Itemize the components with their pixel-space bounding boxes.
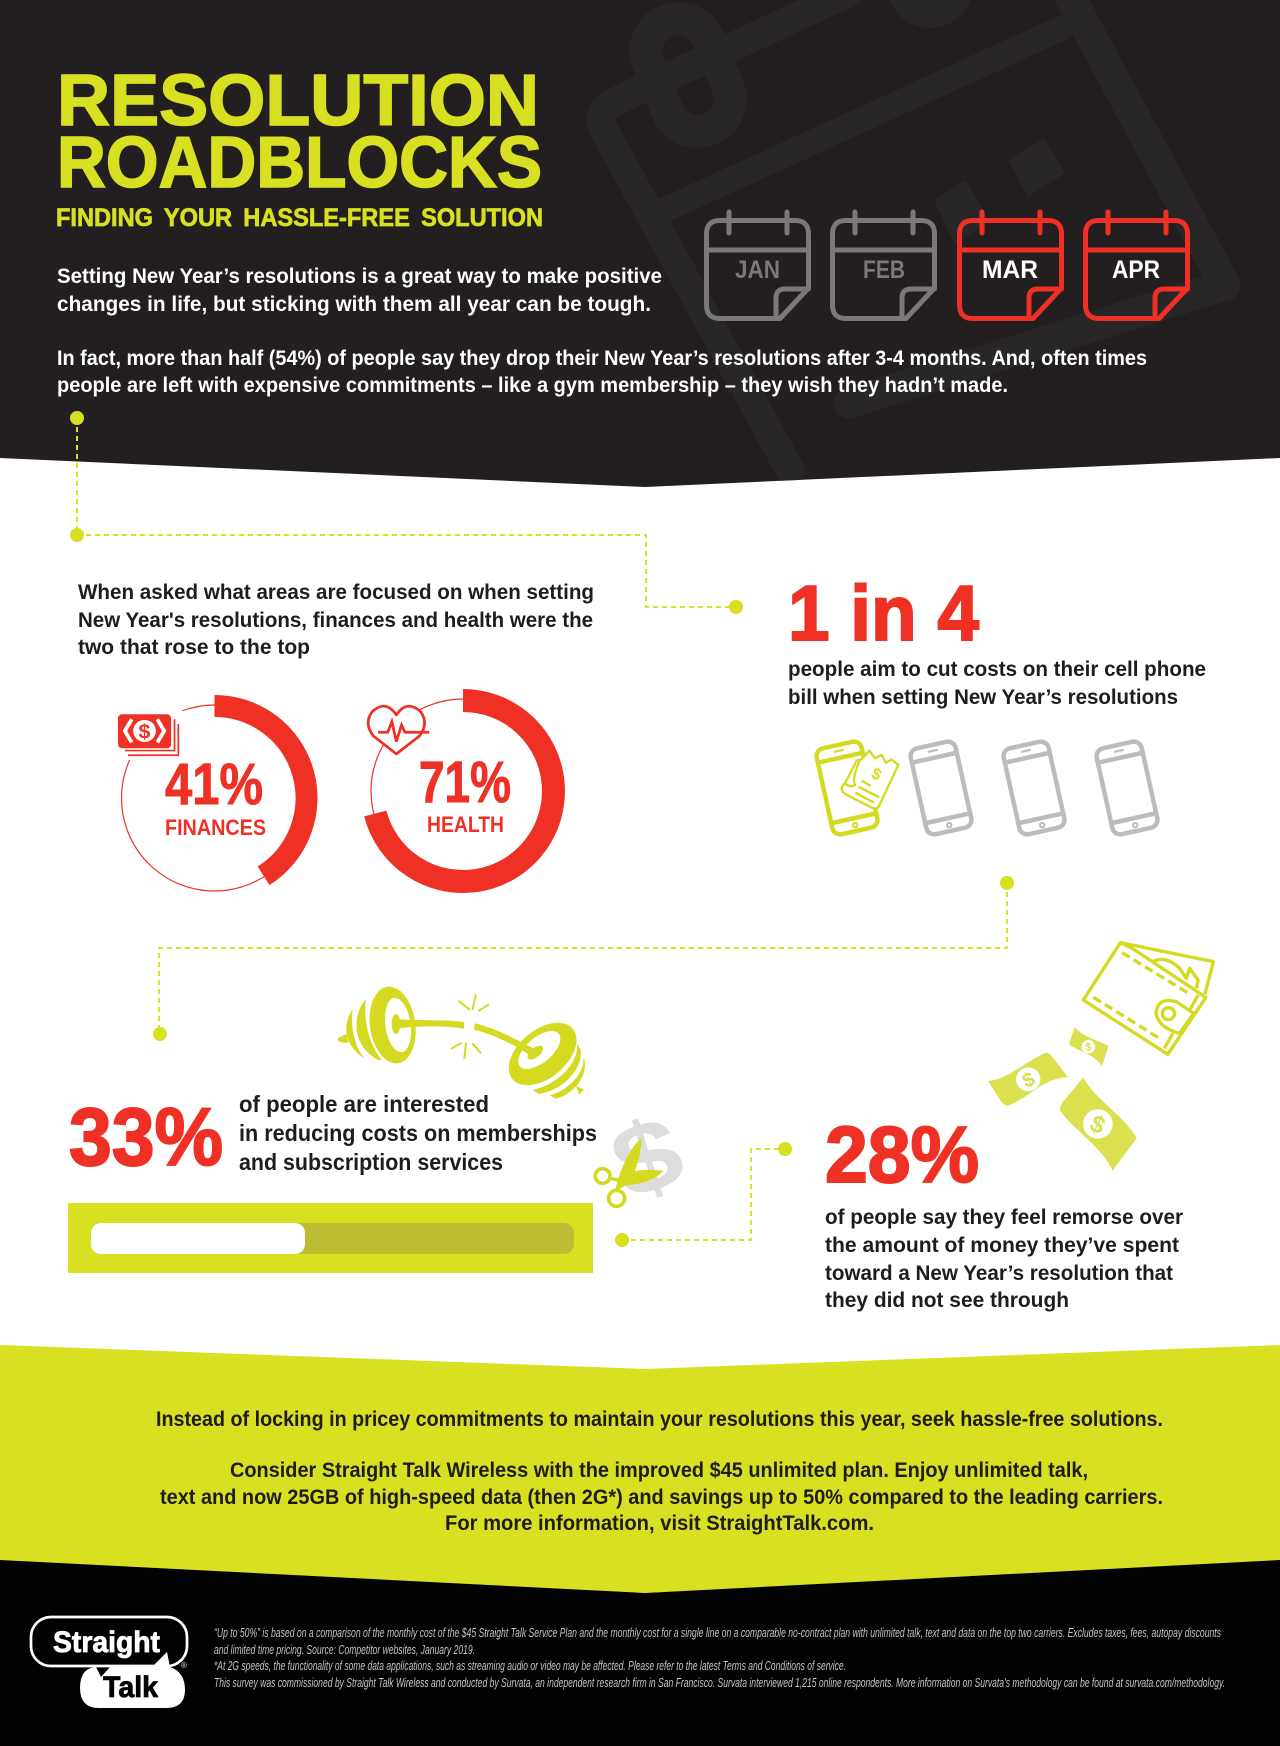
connector: phones to 33%: [153, 876, 1014, 1041]
icon: scissors cutting dollar: $: [598, 1094, 696, 1221]
text: memberships: of people are interested: [239, 1091, 489, 1117]
intro text: changes in life, but sticking with them all year can be tough.: [57, 293, 651, 316]
text: cell phone bill: [788, 658, 1206, 709]
footnotes: and limited time pricing. Source: Competitor websites, January 2019.: [214, 1643, 475, 1657]
connector: header to 1 in 4: [70, 411, 743, 614]
footnotes: [214, 1626, 1225, 1690]
title: ROADBLOCKS: [57, 123, 542, 203]
text: focus areas: When asked what areas are focused on when setting: [78, 581, 594, 604]
icon: small bill: [1069, 1027, 1109, 1066]
text: memberships: in reducing costs on memberships: [239, 1120, 597, 1146]
intro text: Setting New Year’s resolutions is a great way to make positive: [57, 265, 662, 288]
title: [57, 61, 542, 203]
panel: lime call to action: [0, 1345, 1280, 1593]
text: remorse: of people say they feel remorse over: [825, 1206, 1183, 1229]
logo: Straight Talk: ®: [181, 1661, 187, 1670]
text: seek hassle-free solutions: Instead of locking in pricey commitments to maintain your resolutions this year, seek hassle-free solutions.: [156, 1408, 1163, 1431]
calendar: APR: APR: [1112, 256, 1160, 284]
calendar: JAN: [706, 212, 808, 318]
connector: bar to 28%: [615, 1142, 792, 1247]
calendar: FEB: FEB: [863, 256, 905, 284]
text: focus areas: [78, 581, 594, 659]
icon: broken barbell: [338, 984, 588, 1099]
progress bar: [68, 1203, 593, 1273]
text: offer details: Consider Straight Talk Wireless with the improved $45 unlimited plan. Enjoy unlimited talk,: [230, 1459, 1088, 1482]
icon: phone with bill: [815, 740, 879, 836]
text: remorse: they did not see through: [825, 1289, 1069, 1312]
subtitle: FINDING YOUR HASSLE-FREE SOLUTION: [56, 204, 543, 232]
body text: In fact, more than half (54%) of people say they drop their New Year’s resolutions after 3-4 months. And, often times: [57, 347, 1147, 370]
icon: wallet with flying money: [988, 943, 1213, 1171]
icon: small bill: $: [1085, 1042, 1091, 1054]
calendar: MAR: MAR: [982, 256, 1038, 284]
text: memberships: [239, 1091, 597, 1175]
title: RESOLUTION: [57, 61, 539, 141]
value: 41%: 41%: [165, 752, 263, 817]
icon: large bill: $: [1085, 1110, 1110, 1140]
intro text: [57, 265, 662, 316]
text: remorse: the amount of money they’ve spent: [825, 1234, 1179, 1257]
text: memberships: and subscription services: [239, 1149, 503, 1175]
background calendar watermark: [780, 480, 801, 481]
icon: phone 2: [909, 740, 973, 836]
panel: dark header: [0, 0, 1280, 487]
text: remorse: toward a New Year’s resolution that: [825, 1262, 1173, 1285]
label: health: HEALTH: [427, 812, 504, 837]
logo: Straight Talk: [31, 1617, 187, 1708]
stat: 1 in 4: 1 in 4: [788, 569, 979, 657]
icon: receipt: [842, 751, 898, 809]
text: focus areas: two that rose to the top: [78, 636, 310, 659]
text: focus areas: New Year's resolutions, finances and health were the: [78, 609, 593, 632]
text: offer details: text and now 25GB of high-speed data (then 2G*) and savings up to 50% compared to the leading carriers.: [160, 1486, 1163, 1509]
label: finances: FINANCES: [165, 815, 266, 840]
calendar: APR: [1086, 212, 1188, 318]
icon: receipt: $: [868, 765, 884, 784]
text: cell phone bill: bill when setting New Year’s resolutions: [788, 686, 1178, 709]
text: offer details: [160, 1459, 1163, 1535]
calendar: JAN: JAN: [735, 256, 780, 284]
body text: people are left with expensive commitments – like a gym membership – they wish they hadn’t made.: [57, 374, 1008, 397]
calendar: MAR: [960, 212, 1062, 318]
stat: 28%: 28%: [825, 1110, 979, 1199]
stat: 33%: 33%: [69, 1092, 223, 1183]
icon: money stack: $: [139, 721, 151, 743]
icon: money stack: [112, 710, 182, 760]
icon: phone 3: [1002, 740, 1066, 836]
icon: wallet: [1083, 943, 1213, 1054]
logo: Straight Talk: Talk: [103, 1671, 158, 1704]
calendar: FEB: [832, 212, 934, 318]
icon: phone 4: [1095, 740, 1159, 836]
chart: finances donut: [112, 705, 308, 891]
icon: heart with pulse: [368, 706, 429, 754]
text: remorse: [825, 1206, 1183, 1312]
icon: large bill: [1060, 1077, 1137, 1171]
body text: [57, 347, 1147, 397]
panel: black footer: [0, 1560, 1280, 1746]
footnotes: *At 2G speeds, the functionality of some data applications, such as streaming audio or video may be affected. Please refer to the latest Terms and Conditions of service.: [214, 1659, 846, 1673]
text: cell phone bill: people aim to cut costs on their cell phone: [788, 658, 1206, 681]
value: 71%: 71%: [419, 750, 511, 815]
icon: left bill: [988, 1053, 1068, 1106]
icon: left bill: $: [1019, 1068, 1039, 1093]
text: offer details: For more information, visit StraightTalk.com.: [445, 1512, 874, 1535]
icon row: phones: [815, 740, 1159, 836]
logo: Straight Talk: Straight: [53, 1626, 160, 1659]
chart: health donut: [368, 699, 555, 883]
